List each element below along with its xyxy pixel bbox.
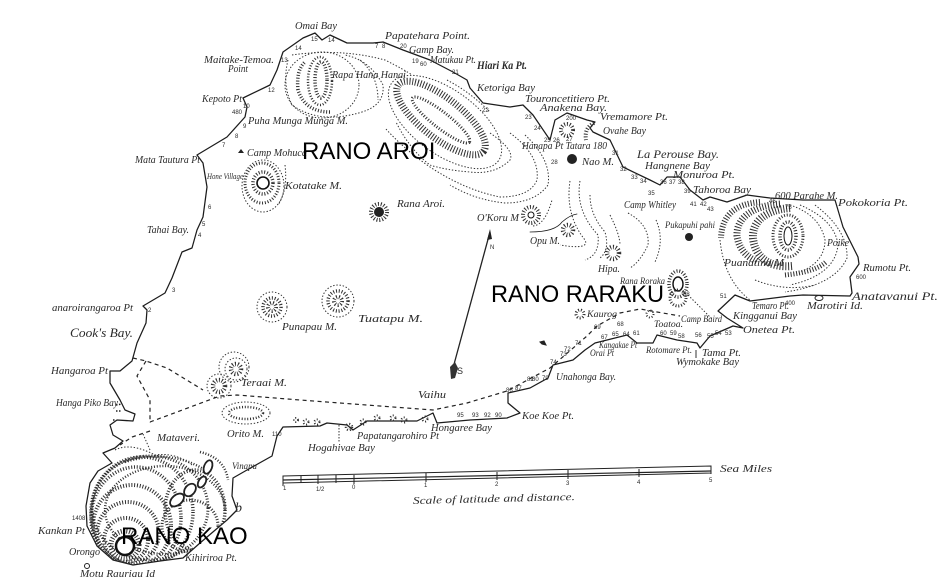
place labels: west coast and Rano Kao: Mataveri. bbox=[156, 433, 200, 444]
sounding numbers along the coast: 75 bbox=[785, 205, 792, 211]
place labels: north coast: Matukau Pt. bbox=[429, 55, 476, 66]
heading: Rano Aroi: RANO AROI bbox=[302, 138, 435, 165]
place labels: south coast: Hogahivae Bay bbox=[307, 443, 376, 454]
place labels: east and Poike: Kingganui Bay bbox=[732, 311, 798, 322]
sounding numbers along the coast: 32 bbox=[620, 167, 627, 173]
scale bar: 1 bbox=[424, 483, 428, 489]
sounding numbers along the coast: 60 bbox=[420, 62, 427, 68]
sounding numbers along the coast: 35 bbox=[648, 191, 655, 197]
sounding numbers along the coast: 36 bbox=[660, 180, 667, 186]
sounding numbers along the coast: 7 bbox=[222, 143, 226, 149]
scale caption: Scale of latitude and distance. bbox=[413, 492, 575, 507]
place labels: north coast: Nao M. bbox=[581, 157, 614, 168]
sounding numbers along the coast: 14 bbox=[328, 38, 335, 44]
sounding numbers along the coast: 24 bbox=[534, 126, 541, 132]
sounding numbers along the coast: 23 bbox=[525, 115, 532, 121]
sounding numbers along the coast: 95 bbox=[457, 413, 464, 419]
place labels: north coast: Camp Mohuca bbox=[247, 148, 307, 159]
sounding numbers along the coast: 14 bbox=[295, 46, 302, 52]
place labels: north coast: Kotatake M. bbox=[284, 181, 342, 192]
place labels: east and Poike: Puanatina M bbox=[723, 258, 785, 269]
place labels: east and Poike bbox=[477, 147, 938, 336]
north arrow bbox=[450, 229, 494, 379]
sounding numbers along the coast: 87 bbox=[515, 386, 522, 392]
mountains: O'Koru, Opu, Hipa and their contours bbox=[523, 181, 693, 268]
place labels: west coast and Rano Kao: 1408 bbox=[72, 516, 86, 522]
sounding numbers along the coast: 38 bbox=[678, 180, 685, 186]
place labels: west coast and Rano Kao: Kihiriroa Pt. bbox=[184, 553, 237, 564]
place labels: east and Poike: Temaro Pt. bbox=[752, 301, 789, 312]
scale bar bbox=[283, 466, 713, 493]
place labels: south coast: Vinapu bbox=[232, 461, 257, 471]
place labels: east and Poike: 600 Parahe M. bbox=[775, 191, 838, 202]
sounding numbers along the coast: 4 bbox=[198, 233, 202, 239]
sounding numbers along the coast: 13 bbox=[281, 58, 288, 64]
sounding numbers along the coast: 68 bbox=[617, 322, 624, 328]
sounding numbers along the coast: 46 bbox=[769, 199, 776, 205]
place labels: east and Poike: Hipa. bbox=[597, 264, 620, 275]
place labels: south coast: Papatangarohiro Pt bbox=[356, 431, 439, 442]
place labels: south coast: Koe Koe Pt. bbox=[521, 411, 574, 422]
place labels: east and Poike: Poike bbox=[826, 238, 850, 249]
sounding numbers along the coast: 55 bbox=[707, 334, 714, 340]
place labels: east and Poike: O'Koru M bbox=[477, 213, 520, 224]
sounding numbers along the coast: 31 bbox=[612, 151, 619, 157]
place labels: north coast: Hone Village bbox=[206, 172, 243, 181]
sounding numbers along the coast: 58 bbox=[683, 292, 690, 298]
sounding numbers along the coast: 28 bbox=[551, 160, 558, 166]
heading: Rano Kao: RANO KAO bbox=[121, 523, 248, 550]
scale bar: 2 bbox=[495, 482, 499, 488]
place labels: north coast: Hiari Ka Pt. bbox=[476, 58, 527, 72]
place labels: east and Poike: Pukapuhi pahi bbox=[664, 220, 715, 230]
heading: Rano Raraku: RANO RARAKU bbox=[491, 282, 664, 308]
sounding numbers along the coast: 6 bbox=[208, 205, 212, 211]
sounding numbers along the coast: 69 bbox=[594, 325, 601, 331]
place labels: north coast: Tahai Bay. bbox=[147, 225, 189, 236]
sounding numbers along the coast: 21 bbox=[452, 70, 459, 76]
place labels: east and Poike: Rana Roraka bbox=[619, 276, 665, 286]
sounding numbers along the coast: 79 bbox=[542, 376, 549, 382]
dashed tracks bbox=[120, 295, 713, 450]
sounding numbers along the coast: 80 bbox=[532, 377, 539, 383]
north arrow: N bbox=[490, 245, 494, 251]
sounding numbers along the coast: 65 bbox=[612, 332, 619, 338]
sounding numbers along the coast: 34 bbox=[640, 179, 647, 185]
place labels: north coast: Hanapa Pt Tatara 180 bbox=[521, 141, 607, 152]
place labels: north coast: Rapa Hana Hanai bbox=[331, 70, 406, 81]
place labels: north coast: Rana Aroi. bbox=[396, 199, 445, 210]
mountain: Rano Raraku bbox=[669, 271, 687, 306]
sounding numbers along the coast: 41 bbox=[690, 202, 697, 208]
place labels: south coast: Punapau M. bbox=[281, 322, 337, 333]
sounding numbers along the coast: 92 bbox=[484, 413, 491, 419]
place labels: east and Poike: Camp Whitley bbox=[624, 200, 677, 211]
sounding numbers along the coast: 5 bbox=[202, 222, 206, 228]
place labels: south coast: Orai Pt bbox=[590, 348, 614, 358]
small ticks and dotted symbols near the coast bbox=[113, 149, 696, 443]
place labels: east and Poike: Monuroa Pt. bbox=[672, 170, 735, 181]
scale bar: 5 bbox=[709, 478, 713, 484]
sounding numbers along the coast: 61 bbox=[633, 331, 640, 337]
sounding numbers along the coast: 25 bbox=[544, 138, 551, 144]
sounding numbers along the coast: 42 bbox=[700, 202, 707, 208]
mountain: Ohutu ridge bbox=[373, 57, 549, 203]
sounding numbers along the coast: 56 bbox=[695, 333, 702, 339]
place labels: east and Poike: 600 bbox=[856, 275, 867, 281]
sounding numbers along the coast: 12 bbox=[268, 88, 275, 94]
scale units label: Sea Miles bbox=[720, 464, 772, 475]
sounding numbers along the coast: 480 bbox=[232, 110, 243, 116]
place labels: north coast: Anakena Bay. bbox=[539, 103, 607, 114]
sounding numbers along the coast: 67 bbox=[601, 335, 608, 341]
mountain: Rana Aroi bbox=[371, 204, 387, 220]
place labels: east and Poike: Rumotu Pt. bbox=[862, 263, 911, 274]
mountain: Poike massif bbox=[720, 202, 847, 300]
sounding numbers along the coast bbox=[148, 37, 796, 438]
sounding numbers along the coast: 22 bbox=[482, 108, 489, 114]
mountain: Punapau bbox=[257, 292, 287, 322]
place labels: east and Poike: Opu M. bbox=[530, 236, 560, 247]
place labels: south coast: Wymokake Bay bbox=[676, 357, 740, 368]
mountain: Rapa Hana Hanai bbox=[285, 52, 412, 118]
sounding numbers along the coast: 26 bbox=[553, 138, 560, 144]
sounding numbers along the coast: 73 bbox=[560, 352, 567, 358]
sounding numbers along the coast: 8 bbox=[235, 134, 239, 140]
sounding numbers along the coast: 64 bbox=[623, 332, 630, 338]
sounding numbers along the coast: 58 bbox=[678, 334, 685, 340]
sounding numbers along the coast: 2 bbox=[148, 308, 152, 314]
sounding numbers along the coast: 90 bbox=[495, 413, 502, 419]
sounding numbers along the coast: 37 bbox=[669, 180, 676, 186]
sounding numbers along the coast: 200 bbox=[566, 116, 577, 122]
sounding numbers along the coast: 82 bbox=[527, 377, 534, 383]
sounding numbers along the coast: 39 bbox=[684, 189, 691, 195]
sounding numbers along the coast: 19 bbox=[412, 59, 419, 65]
sounding numbers along the coast: 7 bbox=[375, 44, 379, 50]
place labels: south coast: Teraai M. bbox=[241, 378, 287, 389]
place labels: east and Poike: La Perouse Bay. bbox=[636, 147, 719, 161]
sounding numbers along the coast: 72 bbox=[564, 347, 571, 353]
sounding numbers along the coast: 51 bbox=[720, 294, 727, 300]
place labels: north coast: Mata Tautura Pt bbox=[134, 155, 200, 166]
sounding numbers along the coast: 15 bbox=[311, 37, 318, 43]
mountain: Kotatake bbox=[242, 160, 286, 212]
place labels: south coast: Vaihu bbox=[418, 390, 446, 401]
place labels: east and Poike: Marotiri Id. bbox=[806, 301, 863, 312]
sounding numbers along the coast: 33 bbox=[631, 175, 638, 181]
scale bar: 1 bbox=[283, 486, 287, 492]
north arrow: S bbox=[457, 366, 463, 376]
sounding numbers along the coast: 43 bbox=[707, 207, 714, 213]
place labels: north coast: Maitake-Temoa. bbox=[203, 55, 274, 66]
place labels: east and Poike: Anatavanui Pt. bbox=[851, 291, 938, 303]
place labels: west coast and Rano Kao: Hangaroa Pt bbox=[50, 366, 108, 377]
place labels: north coast: Papatehara Point. bbox=[384, 31, 470, 42]
sounding numbers along the coast: 20 bbox=[400, 44, 407, 50]
place labels: south coast: Hongaree Bay bbox=[430, 423, 493, 434]
place labels: east and Poike: Hangnene Bay bbox=[644, 161, 711, 172]
sounding numbers along the coast: 71 bbox=[575, 341, 582, 347]
place labels: west coast and Rano Kao: Orongo bbox=[69, 547, 100, 558]
sounding numbers along the coast: 59 bbox=[670, 331, 677, 337]
place labels: north coast: Touroncetitiero Pt. bbox=[525, 94, 610, 105]
mountains: Nao and Tatara bbox=[561, 123, 594, 164]
place labels: north coast: Gamp Bay. bbox=[409, 45, 454, 56]
place labels: north coast: Ketoriga Bay bbox=[476, 83, 536, 94]
sounding numbers along the coast: 9 bbox=[243, 124, 247, 130]
sounding numbers along the coast: 74 bbox=[550, 360, 557, 366]
place labels: west coast and Rano Kao: Kankan Pt bbox=[37, 526, 85, 537]
place labels: west coast and Rano Kao: Motu Rauriau Id bbox=[79, 569, 156, 580]
scale bar: 0 bbox=[352, 485, 356, 491]
sounding numbers along the coast: 60 bbox=[660, 331, 667, 337]
place labels: north coast: Omai Bay bbox=[295, 21, 338, 32]
place labels: north coast: Kepoto Pt bbox=[201, 94, 242, 105]
scale bar: 4 bbox=[637, 480, 641, 486]
place labels: south coast: Rotomare Pt. bbox=[645, 345, 692, 355]
place labels: north coast: Point bbox=[227, 64, 248, 75]
sounding numbers along the coast: 54 bbox=[715, 331, 722, 337]
mountain: Rano Kao massif bbox=[91, 447, 228, 569]
place labels: east and Poike: Pokokoria Pt. bbox=[837, 198, 908, 209]
place labels: south coast bbox=[227, 309, 741, 471]
sounding numbers along the coast: 8 bbox=[382, 44, 386, 50]
place labels: west coast and Rano Kao bbox=[37, 303, 242, 580]
mountain: Tuatapu bbox=[322, 285, 354, 317]
place labels: south coast: Tama Pt. bbox=[702, 348, 741, 359]
place labels: east and Poike: Tahoroa Bay bbox=[693, 185, 752, 196]
place labels: south coast: Unahonga Bay. bbox=[556, 372, 616, 383]
sounding numbers along the coast: 110 bbox=[272, 432, 282, 438]
sounding numbers along the coast: 400 bbox=[785, 301, 796, 307]
mountain: Orito bbox=[222, 402, 270, 424]
sounding numbers along the coast: 53 bbox=[725, 331, 732, 337]
place labels: west coast and Rano Kao: Cook's Bay. bbox=[70, 326, 133, 340]
place labels: south coast: Kaurog bbox=[586, 309, 618, 319]
place labels: south coast: Orito M. bbox=[227, 429, 264, 440]
scale bar: 1/2 bbox=[316, 487, 325, 493]
place labels: north coast: Ovahe Bay bbox=[603, 126, 647, 137]
place labels: west coast and Rano Kao: anaroirangaroa Pt bbox=[52, 303, 133, 314]
place labels: south coast: Toatoa. bbox=[654, 319, 683, 329]
scale bar: 3 bbox=[566, 481, 570, 487]
place labels: west coast and Rano Kao: Hanga Piko Bay bbox=[55, 398, 119, 409]
sounding numbers along the coast: 93 bbox=[472, 413, 479, 419]
place labels: west coast and Rano Kao: b bbox=[235, 501, 242, 516]
place labels: east and Poike: Onetea Pt. bbox=[743, 325, 795, 336]
mountain: Teraai bbox=[207, 352, 249, 398]
place labels: south coast: Kangakae Pt bbox=[598, 340, 637, 350]
place labels: north coast bbox=[134, 21, 668, 236]
place labels: north coast: Puha Munga Munga M. bbox=[247, 116, 348, 127]
place labels: south coast: Tuatapu M. bbox=[358, 314, 423, 325]
sounding numbers along the coast: 10 bbox=[243, 104, 250, 110]
coastline bbox=[86, 33, 859, 565]
place labels: north coast: Vremamore Pt. bbox=[600, 112, 668, 123]
sounding numbers along the coast: 86 bbox=[506, 388, 513, 394]
place labels: east and Poike: Camp Baird bbox=[681, 314, 722, 324]
sounding numbers along the coast: 3 bbox=[172, 288, 176, 294]
sounding numbers along the coast: 27 bbox=[566, 137, 573, 143]
